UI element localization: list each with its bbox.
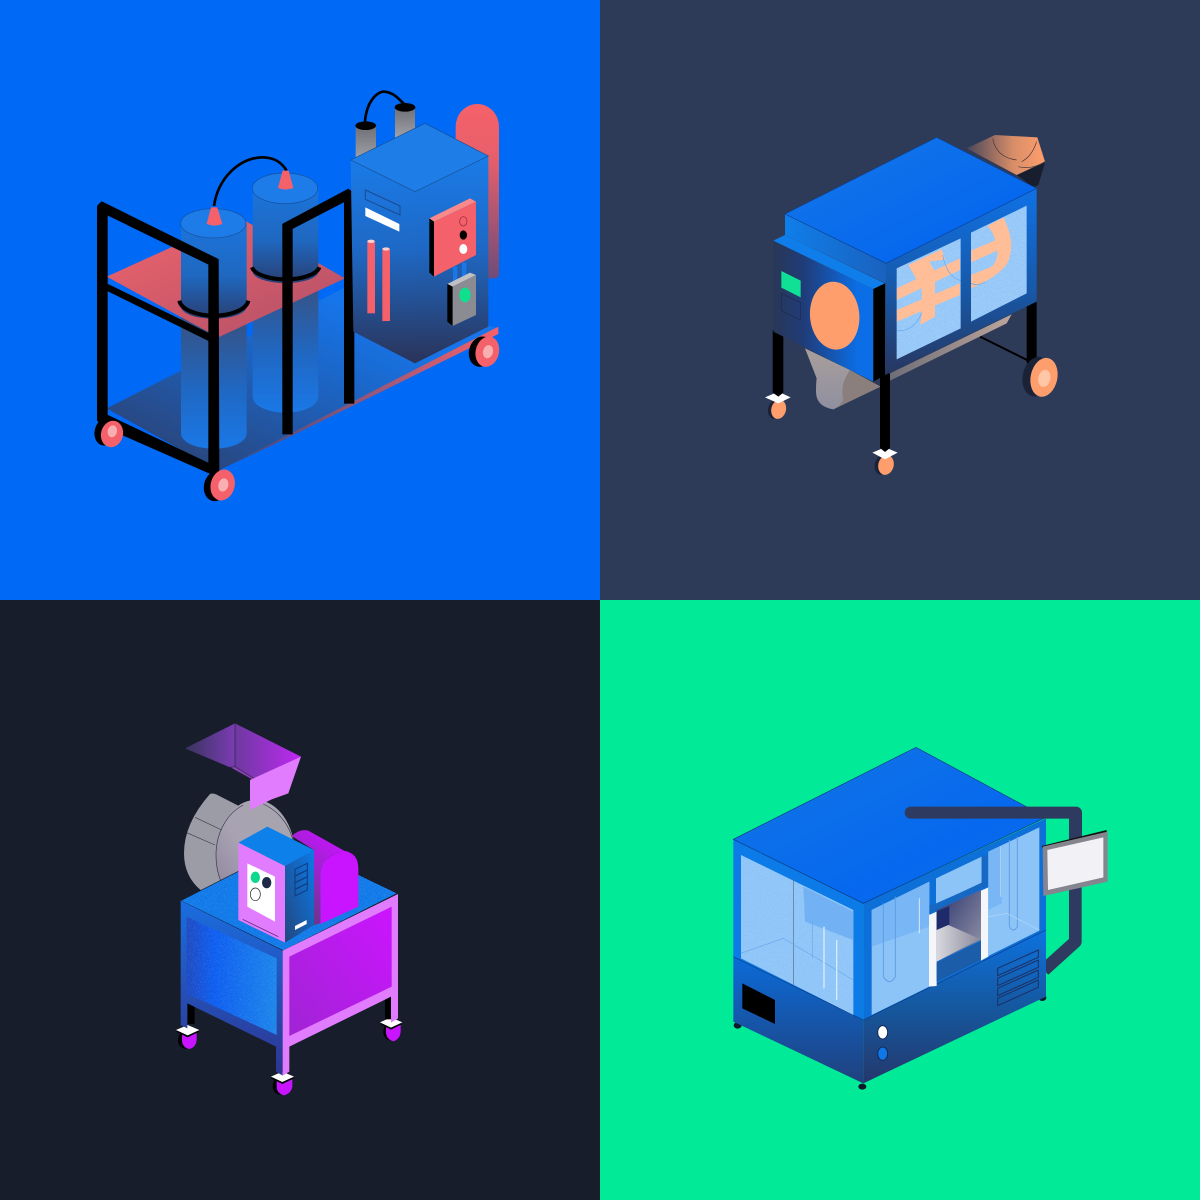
panel: navy machine with orange parts <box>600 0 1200 600</box>
monitor screen <box>1042 830 1108 896</box>
left windows <box>741 855 853 1015</box>
vent slats <box>998 950 1038 1006</box>
arm rear section <box>1044 813 1075 970</box>
control box <box>238 827 314 943</box>
left caster <box>765 392 791 420</box>
panel: blue cart machine <box>0 0 600 600</box>
right window one <box>872 882 929 1015</box>
left face <box>733 839 863 1083</box>
right window two <box>988 827 1039 956</box>
black frame left <box>97 202 219 475</box>
right window <box>971 206 1027 322</box>
side compartment <box>773 235 885 382</box>
panel: green enclosed machine <box>600 600 1200 1200</box>
shelf front edge <box>218 327 498 471</box>
left window <box>897 238 961 359</box>
black vent <box>742 983 775 1024</box>
table left face <box>181 901 283 1076</box>
left leg <box>773 330 783 397</box>
black rear legs <box>187 993 392 1024</box>
funnel <box>967 135 1045 187</box>
control cabinet <box>351 123 488 363</box>
monitor arm <box>911 813 1076 837</box>
cable between cylinders <box>214 157 287 206</box>
rear leg <box>1027 300 1037 363</box>
front cylinder upper part <box>179 209 248 319</box>
right face <box>885 188 1037 375</box>
back cylinder upper part <box>252 173 319 283</box>
status buttons <box>878 1026 888 1060</box>
red caps <box>207 171 293 226</box>
panel: dark grinder machine <box>0 600 600 1200</box>
right face <box>863 818 1046 1083</box>
upper strip <box>785 214 886 283</box>
rear wheel <box>1019 354 1061 399</box>
top surface <box>785 137 1037 263</box>
lower shelf <box>107 287 498 471</box>
back cylinder lower part <box>253 272 318 413</box>
red control panel <box>429 198 476 277</box>
lower bin <box>805 314 1012 409</box>
hopper <box>185 723 301 810</box>
upper centre window <box>929 855 988 913</box>
centre caster <box>872 447 898 477</box>
white pillars <box>929 887 988 987</box>
feet <box>734 994 1046 1090</box>
top surface <box>733 747 1046 903</box>
grey drum <box>184 793 295 910</box>
wheels <box>92 334 502 504</box>
rear strut <box>980 337 1028 361</box>
wires <box>453 263 466 283</box>
green button box <box>447 273 476 326</box>
grey cylinders with cable <box>355 92 415 162</box>
door opening <box>937 890 981 982</box>
front cylinder lower part <box>181 307 247 449</box>
caster wheels <box>178 1023 401 1095</box>
black frame right <box>283 189 354 434</box>
magenta hood <box>292 830 358 925</box>
caster plates <box>176 1017 402 1084</box>
table top <box>181 843 397 951</box>
upper red shelf <box>107 222 345 337</box>
red back tank <box>456 104 499 278</box>
table right face <box>283 894 398 1076</box>
centre leg <box>880 373 890 452</box>
